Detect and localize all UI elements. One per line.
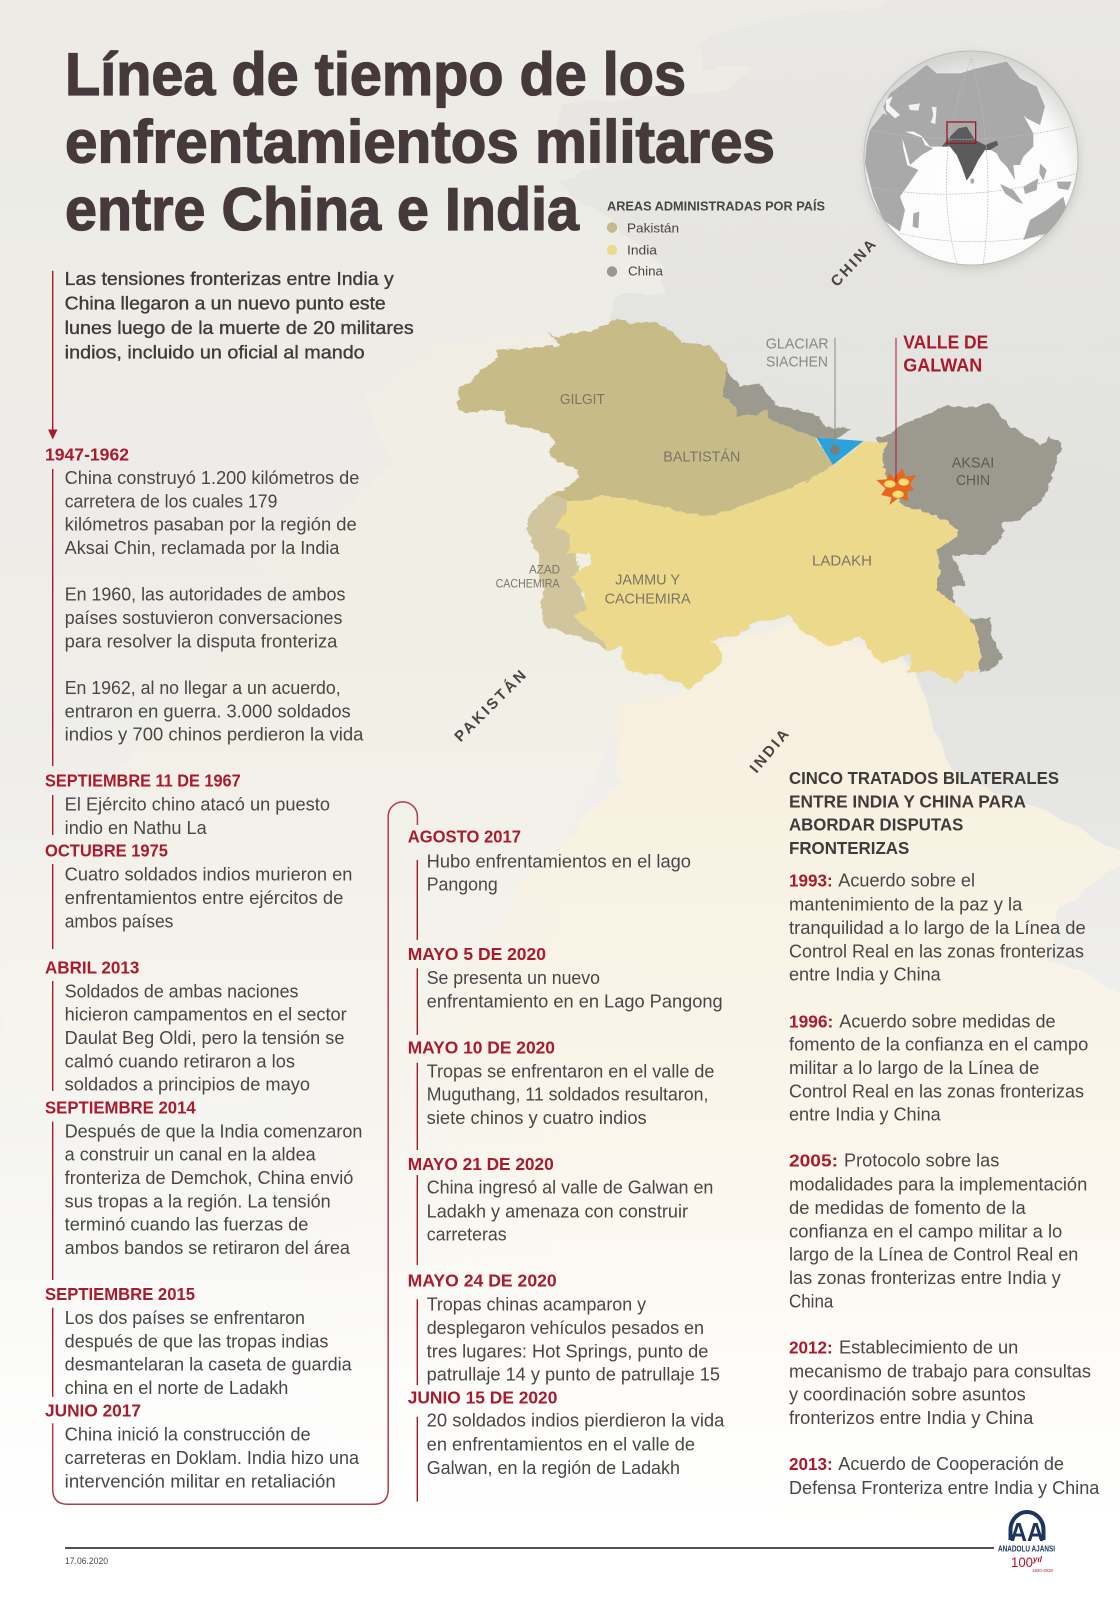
entry: 1947-1962: carretera de los cuales 179: [65, 491, 277, 511]
entry: septiembre 2015: china en el norte de Ladakh: [65, 1378, 288, 1398]
entry: abril 2013: hicieron campamentos en el sector: [65, 1005, 347, 1025]
treaty 1996: Control Real en las zonas fronterizas: [789, 1081, 1084, 1101]
entry: septiembre 2014: SEPTIEMBRE 2014: [45, 1097, 196, 1117]
entry: mayo 5 de 2020: Se presenta un nuevo: [427, 968, 600, 988]
entry: junio 2017: [45, 1401, 360, 1491]
entry: mayo 21 de 2020: Ladakh y amenaza con construir: [427, 1201, 688, 1221]
entry: junio 2017: China inició la construcción de: [65, 1425, 311, 1445]
treaty 1993: Control Real en las zonas fronterizas: [789, 941, 1084, 961]
treaty 2013: 2013:: [789, 1454, 833, 1474]
treaty 1996: [789, 1011, 1088, 1125]
entry: mayo 24 de 2020: desplegaron vehículos pesados en: [427, 1318, 704, 1338]
legend: India: [627, 243, 657, 257]
entry: mayo 10 de 2020: Muguthang, 11 soldados resultaron,: [427, 1085, 708, 1105]
treaty 2013: Defensa Fronteriza entre India y China: [789, 1478, 1100, 1498]
treaty 2013: [789, 1454, 1100, 1498]
entry: junio 2017: carreteras en Doklam. India hizo una: [65, 1448, 360, 1468]
entry: septiembre 2014: terminó cuando las fuerzas de: [65, 1215, 308, 1235]
entry: junio 15 de 2020: [408, 1387, 725, 1502]
map regions: [458, 318, 1063, 688]
entry: 1947-1962: países sostuvieron conversaciones: [65, 608, 342, 628]
callout: Glaciar Siachen: GLACIAR: [766, 337, 829, 353]
treaties heading: ABORDAR DISPUTAS: [789, 815, 963, 835]
entry: agosto 2017: Hubo enfrentamientos en el lago: [427, 851, 691, 871]
entry: abril 2013: calmó cuando retiraron a los: [65, 1051, 295, 1071]
entry: mayo 21 de 2020: [408, 1154, 713, 1265]
map label: Aksai Chin: [952, 455, 994, 489]
map label: Gilgit: GILGIT: [560, 392, 605, 408]
entry: septiembre 2015: Los dos países se enfrentaron: [65, 1308, 305, 1328]
country label: India: INDIA: [747, 724, 794, 776]
map label: Azad Cachemira: [496, 564, 560, 590]
intro text: lunes luego de la muerte de 20 militares: [65, 318, 414, 338]
entry: mayo 10 de 2020: siete chinos y cuatro indios: [427, 1108, 647, 1128]
entry: junio 15 de 2020: JUNIO 15 DE 2020: [408, 1387, 558, 1407]
connector line: column 1 to column 2: [53, 802, 417, 1504]
entry: mayo 5 de 2020: [408, 944, 723, 1035]
entry: octubre 1975: enfrentamientos entre ejércitos de: [65, 888, 343, 908]
entry: mayo 24 de 2020: MAYO 24 DE 2020: [408, 1271, 557, 1291]
logo: Anadolu Ajansi: ANADOLU AJANSI: [998, 1544, 1055, 1554]
entry: septiembre 2014: sus tropas a la región. La tensión: [65, 1191, 331, 1211]
entry: mayo 24 de 2020: Tropas chinas acamparon y: [427, 1295, 646, 1315]
entry: junio 15 de 2020: en enfrentamientos en el valle de: [427, 1435, 695, 1455]
map label: Aksai Chin: CHIN: [956, 473, 990, 489]
entry: agosto 2017: Pangong: [427, 875, 498, 895]
treaty 1996: entre India y China: [789, 1105, 942, 1125]
treaties heading: FRONTERIZAS: [789, 838, 909, 858]
entry: agosto 2017: AGOSTO 2017: [408, 827, 521, 847]
logo: Anadolu Ajansi: 1920-2020: [1032, 1568, 1053, 1573]
callout: Glaciar Siachen: SIACHEN: [766, 355, 828, 371]
title: [65, 41, 775, 243]
entry: mayo 5 de 2020: MAYO 5 DE 2020: [408, 944, 546, 964]
entry: septiembre 2014: Después de que la India comenzaron: [65, 1121, 362, 1141]
treaty 2005: [789, 1151, 1087, 1311]
map label: Jammu y Cachemira: [605, 572, 691, 607]
treaty 1996: fomento de la confianza en el campo: [789, 1035, 1088, 1055]
treaties heading: [789, 768, 1059, 858]
treaties column: [789, 768, 1100, 1498]
entry: agosto 2017: [408, 827, 691, 940]
treaty 1996: militar a lo largo de la Línea de: [789, 1058, 1039, 1078]
callout: Valle de Galwan: GALWAN: [903, 356, 982, 376]
treaty 2005: Protocolo sobre las: [844, 1151, 999, 1171]
entry: septiembre 2014: fronteriza de Demchok, China envió: [65, 1168, 353, 1188]
intro text: Las tensiones fronterizas entre India y: [65, 269, 394, 289]
entry: junio 15 de 2020: Galwan, en la región de Ladakh: [427, 1458, 680, 1478]
entry: 1947-1962: indios y 700 chinos perdieron la vida: [65, 725, 364, 745]
entry: mayo 5 de 2020: enfrentamiento en en Lago Pangong: [427, 991, 723, 1011]
treaty 2005: las zonas fronterizas entre India y: [789, 1268, 1061, 1288]
treaty 1996: Acuerdo sobre medidas de: [839, 1011, 1056, 1031]
legend: Pakistán: [627, 221, 679, 235]
timeline column 2: [408, 827, 725, 1502]
treaty 1993: [789, 871, 1086, 985]
treaty 1993: entre India y China: [789, 965, 942, 985]
treaty 2005: modalidades para la implementación: [789, 1175, 1087, 1195]
entry: junio 15 de 2020: 20 soldados indios pierdieron la vida: [427, 1411, 725, 1431]
intro text: [65, 269, 414, 363]
entry: mayo 10 de 2020: [408, 1037, 714, 1150]
entry: 1947-1962: En 1962, al no llegar a un acuerdo,: [65, 678, 341, 698]
country label: Pakistán: PAKISTÁN: [451, 665, 531, 745]
callout: Valle de Galwan: [896, 333, 988, 482]
treaty 2012: Establecimiento de un: [839, 1337, 1018, 1357]
map label: Azad Cachemira: CACHEMIRA: [496, 578, 560, 590]
treaty 2012: y coordinación sobre asuntos: [789, 1385, 1026, 1405]
entry: 1947-1962: En 1960, las autoridades de ambos: [65, 585, 345, 605]
map: Kashmir regions: [458, 318, 1063, 688]
callout: Glaciar Siachen: [766, 337, 840, 455]
entry: septiembre 2015: desmantelaran la caseta de guardia: [65, 1355, 353, 1375]
legend: [607, 198, 825, 278]
treaties heading: CINCO TRATADOS BILATERALES: [789, 768, 1059, 788]
entry: septiembre 11 de 1967: El Ejército chino atacó un puesto: [65, 795, 330, 815]
treaty 2012: mecanismo de trabajo para consultas: [789, 1361, 1091, 1381]
entry: mayo 24 de 2020: [408, 1271, 720, 1385]
arrow: intro to timeline: [48, 271, 58, 440]
callout: Valle de Galwan: VALLE DE: [903, 333, 988, 353]
entry: abril 2013: soldados a principios de mayo: [65, 1075, 310, 1095]
logo: Anadolu Ajansi: 100: [1011, 1554, 1033, 1570]
intro text: indios, incluido un oficial al mando: [65, 343, 365, 363]
entry: mayo 10 de 2020: MAYO 10 DE 2020: [408, 1037, 555, 1057]
entry: septiembre 11 de 1967: [45, 771, 330, 838]
treaty 1993: Acuerdo sobre el: [838, 871, 975, 891]
entry: 1947-1962: Aksai Chin, reclamada por la India: [65, 538, 340, 558]
entry: abril 2013: Daulat Beg Oldi, pero la tensión se: [65, 1028, 344, 1048]
timeline column 1: [45, 445, 364, 1491]
logo: Anadolu Ajansi: AA: [1010, 1517, 1044, 1547]
treaty 2005: confianza en el campo militar a lo: [789, 1221, 1062, 1241]
map label: Ladakh: LADAKH: [812, 553, 872, 569]
map label: Baltistán: BALTISTÁN: [663, 449, 740, 466]
map label: Aksai Chin: AKSAI: [952, 455, 994, 471]
treaty 1993: mantenimiento de la paz y la: [789, 895, 1023, 915]
logo: Anadolu Ajansi: yıl: [1032, 1555, 1043, 1564]
entry: mayo 21 de 2020: China ingresó al valle de Galwan en: [427, 1177, 713, 1197]
treaty 2005: China: [789, 1291, 834, 1311]
entry: octubre 1975: [45, 841, 352, 949]
entry: octubre 1975: OCTUBRE 1975: [45, 841, 168, 861]
treaty 2005: largo de la Línea de Control Real en: [789, 1245, 1078, 1265]
map label: Jammu y Cachemira: JAMMU Y: [615, 572, 680, 588]
entry: septiembre 2014: a construir un canal en la aldea: [65, 1145, 317, 1165]
entry: septiembre 2014: ambos bandos se retiraron del área: [65, 1238, 351, 1258]
entry: mayo 21 de 2020: carreteras: [427, 1225, 507, 1245]
entry: 1947-1962: para resolver la disputa fronteriza: [65, 631, 338, 651]
country label: China: CHINA: [828, 234, 881, 290]
entry: septiembre 11 de 1967: SEPTIEMBRE 11 DE 1967: [45, 771, 241, 791]
title: enfrentamientos militares: [65, 108, 775, 176]
treaties heading: ENTRE INDIA Y CHINA PARA: [789, 791, 1026, 811]
icon: clash explosion: [876, 468, 916, 505]
region: Glaciar Siachen: [816, 438, 863, 465]
entry: junio 2017: intervención militar en retaliación: [65, 1471, 336, 1491]
entry: septiembre 11 de 1967: indio en Nathu La: [65, 818, 208, 838]
title: entre China e India: [65, 176, 580, 243]
entry: 1947-1962: kilómetros pasaban por la región de: [65, 515, 357, 535]
entry: mayo 21 de 2020: MAYO 21 DE 2020: [408, 1154, 554, 1174]
title: Línea de tiempo de los: [65, 41, 686, 108]
legend: AREAS ADMINISTRADAS POR PAÍS: [607, 198, 825, 214]
entry: abril 2013: ABRIL 2013: [45, 957, 140, 977]
entry: 1947-1962: [45, 445, 364, 766]
treaty 2012: fronterizos entre India y China: [789, 1408, 1034, 1428]
entry: mayo 10 de 2020: Tropas se enfrentaron en el valle de: [427, 1061, 714, 1081]
treaty 2013: Acuerdo de Cooperación de: [838, 1454, 1064, 1474]
entry: octubre 1975: ambos países: [65, 911, 173, 931]
footer rule and date: 17.06.2020: [65, 1556, 108, 1566]
entry: septiembre 2015: después de que las tropas indias: [65, 1331, 328, 1351]
treaty 1993: 1993:: [789, 871, 833, 891]
treaty 2005: de medidas de fomento de la: [789, 1198, 1027, 1218]
entry: 1947-1962: 1947-1962: [45, 445, 129, 465]
intro text: China llegaron a un nuevo punto este: [65, 293, 386, 313]
legend: China: [628, 264, 663, 278]
map label: Azad Cachemira: AZAD: [529, 564, 560, 576]
entry: septiembre 2015: [45, 1284, 353, 1398]
entry: mayo 24 de 2020: patrullaje 14 y punto de patrullaje 15: [427, 1365, 720, 1385]
treaty 2012: 2012:: [789, 1337, 833, 1357]
entry: septiembre 2014: [45, 1097, 362, 1280]
map label: Jammu y Cachemira: CACHEMIRA: [605, 591, 691, 607]
entry: septiembre 2015: SEPTIEMBRE 2015: [45, 1284, 195, 1304]
treaty 1993: tranquilidad a lo largo de la Línea de: [789, 918, 1086, 938]
entry: octubre 1975: Cuatro soldados indios murieron en: [65, 865, 352, 885]
treaty 2005: 2005:: [789, 1151, 838, 1171]
entry: mayo 24 de 2020: tres lugares: Hot Springs, punto de: [427, 1341, 708, 1361]
entry: junio 2017: JUNIO 2017: [45, 1401, 141, 1421]
treaty 2012: [789, 1337, 1091, 1428]
icon: globe locator: [864, 51, 1079, 269]
logo: Anadolu Ajansi: [998, 1512, 1055, 1573]
entry: abril 2013: [45, 957, 347, 1095]
entry: 1947-1962: China construyó 1.200 kilómetros de: [65, 468, 359, 488]
entry: 1947-1962: entraron en guerra. 3.000 soldados: [65, 701, 351, 721]
treaty 1996: 1996:: [789, 1011, 833, 1031]
entry: abril 2013: Soldados de ambas naciones: [65, 981, 298, 1001]
